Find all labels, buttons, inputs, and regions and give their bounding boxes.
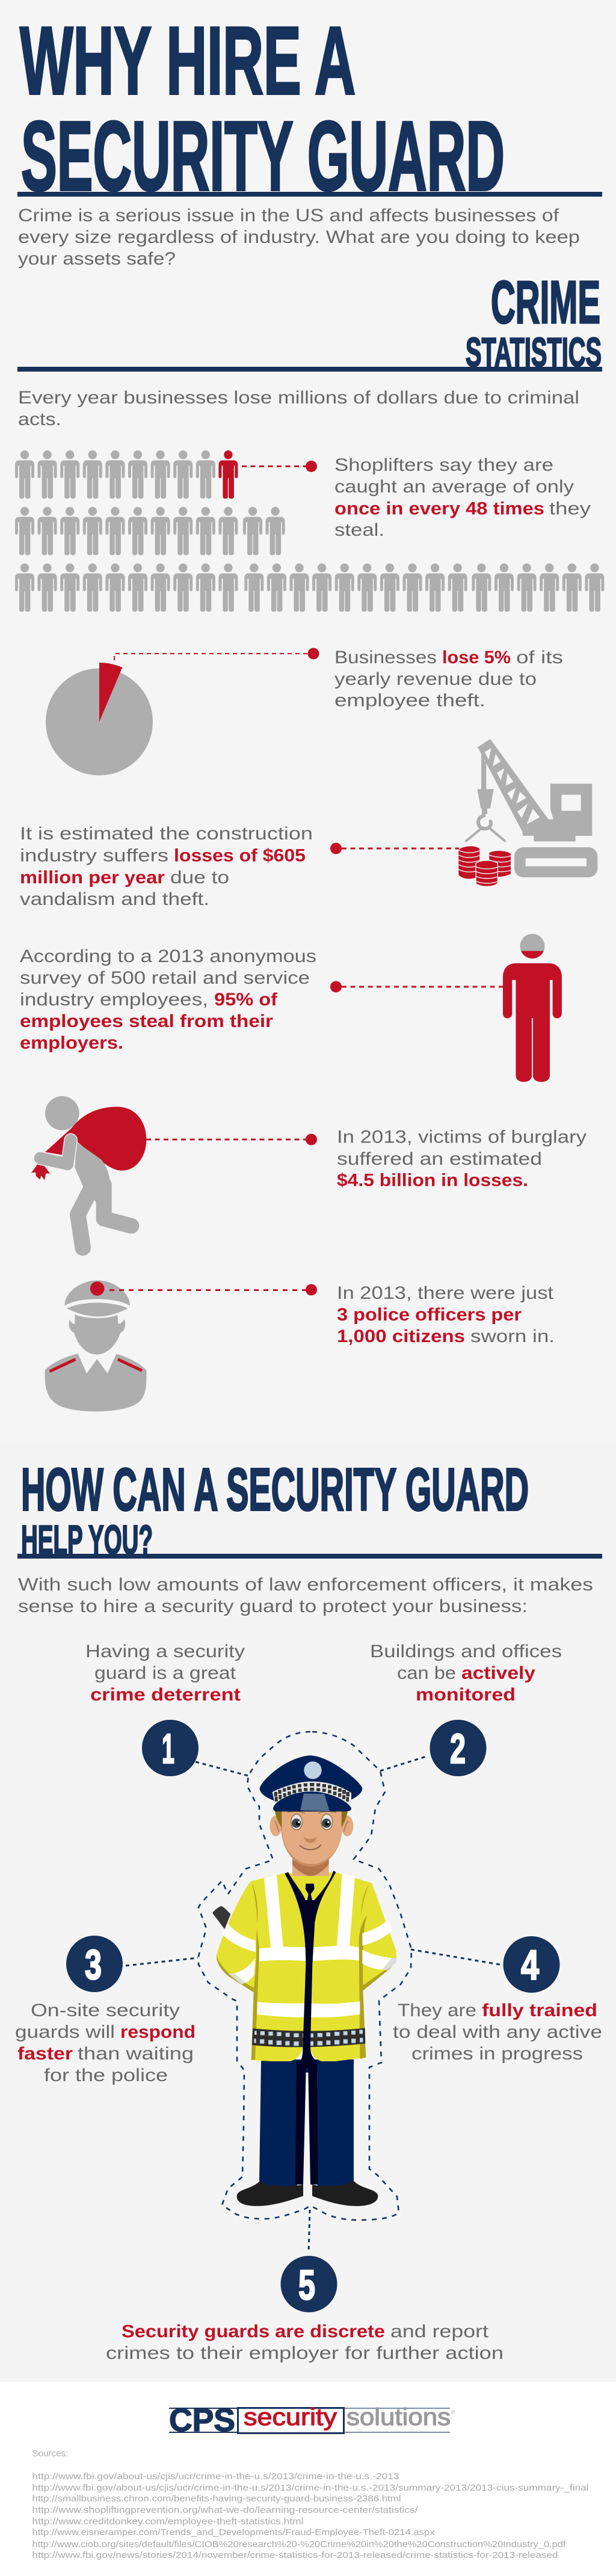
text: employee survey <box>20 946 316 1053</box>
text: shoplifters: steal. <box>334 520 384 540</box>
number badge 3 <box>66 1936 123 1992</box>
text: benefit 3: guards will <box>15 2022 115 2042</box>
text: employee survey: survey of 500 retail and service <box>20 968 310 988</box>
logo: CPS security solutions: solutions <box>346 2404 451 2430</box>
text: benefit 5: and report <box>390 2322 489 2341</box>
sources list: http://www.creditdonkey.com/employee-theft-statistics.html <box>32 2517 303 2527</box>
number badge 1 <box>142 1720 199 1776</box>
text: employee theft: lose 5% <box>442 648 511 667</box>
text: burglary: $4.5 billion in losses. <box>337 1170 528 1191</box>
logo: CPS security solutions <box>169 2402 455 2438</box>
heading: how can a security guard help you: HELP YOU? <box>21 1517 153 1563</box>
text: construction losses: industry suffers <box>20 845 168 866</box>
text: employee survey: employers. <box>20 1033 123 1053</box>
title <box>17 7 602 211</box>
text: construction losses: due to <box>170 868 229 888</box>
intro text: Crime is a serious issue in the US and affects businesses of <box>18 206 559 225</box>
number badge 2 <box>430 1720 486 1776</box>
icon: crane with coins <box>458 739 597 886</box>
text: benefit 3 <box>15 2001 196 2085</box>
number badge 1: 1 <box>162 1725 174 1772</box>
text: how intro: sense to hire a security guard to protect your business: <box>18 1596 528 1616</box>
connector lines to numbered circles <box>126 1756 503 2253</box>
number badge 5 <box>280 2256 337 2313</box>
callout line: shoplifters <box>242 461 317 472</box>
text: police officers: sworn in. <box>470 1326 555 1346</box>
intro text <box>18 206 580 269</box>
statistics intro text <box>18 388 579 429</box>
number badge 5: 5 <box>298 2262 315 2308</box>
sources list: http://smallbusiness.chron.com/benefits-having-security-guard-business-2386.html <box>32 2494 401 2504</box>
text: police officers: 1,000 citizens <box>337 1326 465 1346</box>
callout line: employee survey <box>330 981 503 992</box>
guard head <box>260 1755 362 1876</box>
text: benefit 1: guard is a great <box>94 1663 236 1683</box>
text: benefit 3: for the police <box>44 2065 168 2085</box>
text: police officers: In 2013, there were just <box>337 1283 554 1303</box>
text: construction losses: It is estimated the construction <box>20 824 313 844</box>
text: benefit 1: crime deterrent <box>90 1685 241 1705</box>
text: benefit 4: to deal with any active <box>393 2022 602 2042</box>
text: benefit 1: Having a security <box>85 1642 245 1661</box>
text: benefit 5: crimes to their employer for further action <box>106 2343 504 2363</box>
sources list <box>32 2449 588 2560</box>
logo: CPS security solutions: ® <box>451 2409 455 2415</box>
text: employee theft: yearly revenue due to <box>334 669 537 689</box>
text: employee theft: Businesses <box>334 648 437 667</box>
text: employee survey: 95% of <box>214 990 278 1010</box>
text: benefit 4: fully trained <box>482 2001 597 2020</box>
text: construction losses: vandalism and theft. <box>20 889 209 909</box>
text: benefit 4: crimes in progress <box>411 2044 583 2064</box>
text: benefit 4 <box>393 2001 602 2064</box>
text: construction losses <box>20 824 313 909</box>
sources list: http://www.fbi.gov/about-us/cjis/ucr/crime-in-the-u.s/2013/crime-in-the-u.s.-2013 <box>32 2472 399 2482</box>
text: construction losses: losses of $605 <box>174 845 306 866</box>
title: WHY HIRE A <box>20 7 356 114</box>
logo: CPS security solutions: CPS <box>169 2402 235 2438</box>
text: how intro <box>18 1575 593 1616</box>
text: benefit 2: monitored <box>416 1685 516 1705</box>
text: benefit 1 <box>85 1642 245 1705</box>
text: benefit 3: respond <box>120 2022 196 2042</box>
text: benefit 3: On-site security <box>31 2001 180 2020</box>
sources list: http://www.eisneramper.com/Trends_and_Developments/Fraud-Employee-Theft-0214.aspx <box>32 2528 435 2538</box>
dashed outline around guard <box>199 1732 411 2220</box>
text: construction losses: million per year <box>20 868 165 888</box>
text: benefit 2: can be <box>397 1663 456 1683</box>
number badge 4 <box>503 1936 559 1993</box>
text: employee theft: of its <box>516 648 563 667</box>
text: benefit 3: than waiting <box>78 2044 194 2064</box>
number badge 2: 2 <box>450 1725 466 1772</box>
callout line: burglary <box>146 1134 317 1145</box>
text: employee survey: According to a 2013 anonymous <box>20 946 316 966</box>
illustration: security guard <box>212 1755 396 2206</box>
text: benefit 3: faster <box>17 2044 73 2064</box>
guard trousers and shoes <box>237 2061 378 2206</box>
number badge 3: 3 <box>85 1941 102 1988</box>
sources list: http://www.shopliftingprevention.org/what-we-do/learning-resource-center/statistics/ <box>32 2506 419 2515</box>
text: shoplifters: caught an average of only <box>334 477 574 497</box>
text: how intro: With such low amounts of law enforcement officers, it makes <box>18 1575 593 1595</box>
text: employee theft <box>334 648 563 711</box>
text: benefit 2 <box>370 1642 562 1705</box>
statistics intro text: acts. <box>18 409 61 429</box>
text: shoplifters <box>334 455 591 540</box>
text: employee theft: employee theft. <box>334 690 485 711</box>
sources list: http://www.fbi.gov/news/stories/2014/november/crime-statistics-for-2013-released/crime-statistics-for-2013-released <box>32 2551 558 2560</box>
intro text: every size regardless of industry. What are you doing to keep <box>18 227 580 247</box>
text: shoplifters: they <box>549 499 591 518</box>
pie chart: 5 percent <box>46 663 153 776</box>
sources list: Sources: <box>32 2449 69 2459</box>
text: benefit 5: Security guards are discrete <box>122 2322 385 2341</box>
panel: shoplifters pictogram <box>15 450 604 612</box>
number badge 4: 4 <box>521 1942 539 1989</box>
text: shoplifters: once in every 48 times <box>334 499 544 518</box>
text: benefit 4: They are <box>398 2001 476 2020</box>
text: shoplifters: Shoplifters say they are <box>334 455 553 475</box>
heading: how can a security guard help you <box>17 1456 602 1563</box>
sources list: http://www.ciob.org/sites/default/files/CIOB%20research%20-%20Crime%20in%20the%20Construction%20Industry_0.pdf <box>32 2540 567 2550</box>
text: benefit 2: actively <box>461 1663 535 1683</box>
text: police officers: 3 police officers per <box>337 1305 522 1325</box>
text: police officers <box>337 1283 555 1346</box>
text: benefit 5 <box>106 2322 504 2363</box>
logo: CPS security solutions: security <box>244 2404 337 2430</box>
text: employee survey: industry employees, <box>20 990 208 1010</box>
callout line: pie chart <box>114 648 319 660</box>
icon: police officer <box>45 1280 146 1411</box>
text: employee survey: employees steal from their <box>20 1011 273 1031</box>
text: burglary: suffered an estimated <box>337 1149 542 1169</box>
statistics intro text: Every year businesses lose millions of dollars due to criminal <box>18 388 579 408</box>
callout line: construction <box>330 843 459 854</box>
icon: burglar with sack <box>31 1096 146 1248</box>
text: burglary <box>337 1127 587 1191</box>
heading: crime statistics <box>17 269 602 375</box>
text: benefit 2: Buildings and offices <box>370 1642 562 1661</box>
text: burglary: In 2013, victims of burglary <box>337 1127 587 1147</box>
intro text: your assets safe? <box>18 249 176 269</box>
sources list: http://www.fbi.gov/about-us/cjis/ucr/crime-in-the-u.s/2013/crime-in-the-u.s.-2013/summary-2013/2013-cius-summary-_final <box>32 2483 588 2493</box>
icon: red employee figure <box>503 934 562 1082</box>
callout line: police <box>109 1284 317 1295</box>
guard body and vest <box>212 1864 396 2073</box>
